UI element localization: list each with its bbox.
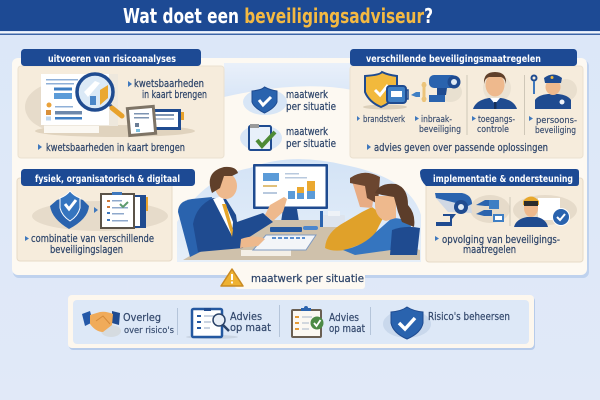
text: kwetsbaarheden rechts: kwetsbaarheden [134,78,204,90]
text: combinatie: combinatie van verschillende [31,233,154,245]
icon: klembord met vinkje [292,306,324,337]
panel: onderste balk [68,295,535,350]
adviseur head [215,173,237,199]
text: opvolging [435,234,560,256]
icon: schild en camera [363,72,462,110]
icon: report with magnifier [25,74,195,137]
callout: maatwerk per situatie 2: maatwerk [286,126,329,138]
icon: schild [383,307,431,339]
desk items [270,227,302,232]
illustration: adviseur en klanten [178,164,420,260]
vrouw [343,218,411,255]
chair [178,197,212,257]
text: overleg: over risico's [124,326,174,336]
text: advies op maat 1: Advies [230,311,262,323]
man [325,207,384,251]
desk [183,220,420,260]
keyboard [253,235,316,250]
callout: waarschuwing maatwerk per situatie [221,268,365,289]
header banner [0,0,600,35]
text: persoonsbeveiliging: persoons- [536,116,577,126]
icon: camera en schermen [435,193,510,226]
heading: verschillende beveiligingsmaatregelen: verschillende beveiligingsmaatregelen [366,54,541,65]
text: overleg [123,312,174,336]
icon: persoonsbeveiliging agent [532,74,577,109]
adviseur body [193,198,273,252]
text: advies op maat 2 [329,312,365,335]
text: persoonsbeveiliging: beveiliging [535,126,576,136]
callout: maatwerk per situatie 1 [243,87,336,115]
text: kwetsbaarheden onder: kwetsbaarheden in kaart brengen [46,142,185,154]
callout: maatwerk per situatie 1: per situatie [286,101,336,113]
text: advies geven: advies geven over passende oplossingen [374,142,548,154]
text: combinatie [25,233,154,256]
text: inbraakbeveiliging [415,115,461,135]
text: toegangscontrole [472,115,515,135]
text: inbraakbeveiliging: inbraak- [421,115,452,125]
text: overleg: Overleg [123,312,161,324]
text: persoonsbeveiliging [529,116,577,136]
icon: bewaker met vinkje [513,195,577,227]
callout: waarschuwing maatwerk per situatie: maatwerk per situatie [251,272,364,285]
title: Wat doet een beveiligingsadviseur? [123,4,433,28]
icon: klembord met vergrootglas [186,308,238,339]
text: advies op maat 2: Advies [329,312,359,324]
text: inbraakbeveiliging: beveiliging [419,125,461,135]
callout: maatwerk per situatie 2 [240,124,336,151]
text: opvolging: maatregelen [463,244,516,256]
icon: handdruk [82,311,121,337]
text: kwetsbaarheden rechts: in kaart brengen [142,89,207,101]
panel: verschillende beveiligingsmaatregelen [350,66,583,158]
text: advies op maat 1: op maat [230,322,271,334]
text: advies op maat 1 [230,311,271,334]
center background bottom [177,159,421,262]
icon: schild en checklist [32,191,168,231]
panel: fysiek, organisatorisch en digitaal [17,178,172,261]
text: risico's beheersen: Risico's beheersen [428,311,510,323]
center background top [224,63,352,97]
callout: maatwerk per situatie 2: per situatie [286,138,336,150]
monitor [253,164,328,225]
heading: uitvoeren van risicoanalyses [21,49,201,66]
text: combinatie: beveiligingslagen [50,244,123,256]
icon: toegangscontrole persoon [473,72,517,109]
text: kwetsbaarheden rechts [128,78,207,101]
text: toegangscontrole: controle [477,125,509,135]
text: brandstverk: brandstverk [363,115,406,125]
heading: uitvoeren van risicoanalyses: uitvoeren van risicoanalyses [48,54,176,65]
panel: implementatie en ondersteuning [426,178,583,262]
main cream panel [12,58,589,278]
heading: implementatie en ondersteuning [420,169,579,186]
text: advies op maat 2: op maat [329,323,365,335]
heading: verschillende beveiligingsmaatregelen [350,49,577,66]
heading: fysiek, organisatorisch en digitaal: fysiek, organisatorisch & digitaal [35,174,180,185]
heading: fysiek, organisatorisch en digitaal [21,169,195,186]
text: toegangscontrole: toegangs- [478,115,515,125]
panel: risicoanalyses [18,66,224,158]
text: opvolging: opvolging van beveiligings- [442,234,560,246]
callout: maatwerk per situatie 1: maatwerk [286,89,329,101]
